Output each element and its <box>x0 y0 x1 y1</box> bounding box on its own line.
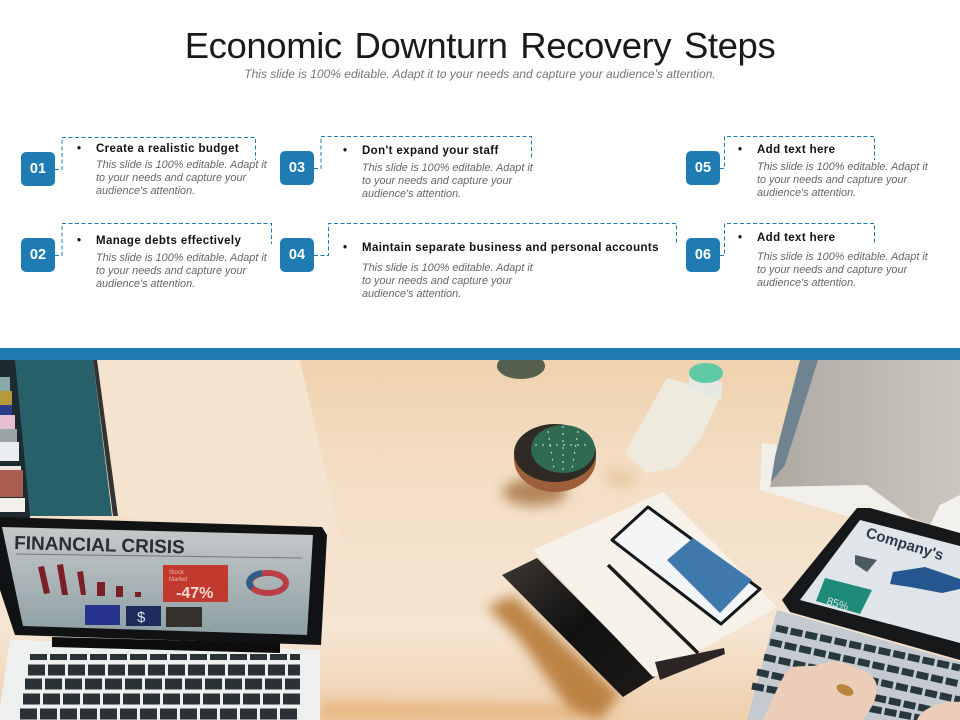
right laptop: Company's <box>864 525 946 564</box>
step 04 text: This slide is 100% editable. Adapt it <box>362 262 533 274</box>
step 06 badge: 06 <box>695 247 711 263</box>
screen donut <box>250 573 286 593</box>
step 05 text <box>757 161 928 199</box>
step 02 text: This slide is 100% editable. Adapt it <box>96 252 267 264</box>
step 06 text: to your needs and capture your <box>757 264 907 276</box>
right folder <box>760 360 960 535</box>
text: • <box>77 143 81 155</box>
step 01 text: audience's attention. <box>96 185 195 197</box>
step 06 heading: Add text here <box>757 232 835 244</box>
step 03 badge: 03 <box>289 160 305 176</box>
text: • <box>343 242 347 254</box>
left laptop <box>0 517 327 720</box>
screen tiles <box>85 605 120 625</box>
step 04 text: to your needs and capture your <box>362 275 512 287</box>
blue band <box>0 348 960 360</box>
step 03 badge <box>280 151 314 185</box>
screen red tile: -47% <box>176 585 213 602</box>
cup at top <box>497 353 545 379</box>
cactus in pot <box>514 424 596 492</box>
step 03 text: to your needs and capture your <box>362 175 512 187</box>
water bottle <box>625 363 723 473</box>
step 05 heading: Add text here <box>757 144 835 156</box>
screen red tile <box>163 565 228 602</box>
step 03 heading: Don't expand your staff <box>362 145 499 157</box>
step 01 text: to your needs and capture your <box>96 172 246 184</box>
step 05 text: to your needs and capture your <box>757 174 907 186</box>
left laptop: $ <box>137 609 146 626</box>
step 06 text <box>757 251 928 289</box>
step 02 heading: Manage debts effectively <box>96 235 241 247</box>
step 03 text <box>362 162 534 200</box>
step 02 text: audience's attention. <box>96 278 195 290</box>
step 04 text <box>362 262 534 300</box>
step 06 text: This slide is 100% editable. Adapt it <box>757 251 928 263</box>
step 04 heading: Maintain separate business and personal accounts <box>362 242 659 254</box>
screen title: FINANCIAL CRISIS <box>14 533 185 558</box>
text: • <box>738 144 742 156</box>
step 02 text <box>96 252 268 290</box>
photo: desk scene <box>0 360 960 720</box>
right laptop <box>747 508 960 720</box>
step 02 badge: 02 <box>30 247 46 263</box>
screen bars <box>38 564 141 597</box>
shadows <box>320 468 640 720</box>
text: • <box>738 232 742 244</box>
step 05 text: audience's attention. <box>757 187 856 199</box>
laptop hinge and deck <box>0 640 320 720</box>
phone <box>612 507 760 624</box>
step 04 badge: 04 <box>289 247 305 263</box>
step 01 text: This slide is 100% editable. Adapt it <box>96 159 267 171</box>
hand <box>763 662 877 720</box>
step 05 text: This slide is 100% editable. Adapt it <box>757 161 928 173</box>
step 04 text: audience's attention. <box>362 288 461 300</box>
step 04 badge <box>280 238 314 272</box>
pen <box>608 565 698 653</box>
step 01 heading: Create a realistic budget <box>96 143 239 155</box>
keyboard <box>20 657 300 714</box>
text: • <box>77 235 81 247</box>
step 03 text: audience's attention. <box>362 188 461 200</box>
subtitle: This slide is 100% editable. Adapt it to your needs and capture your audience's attention. <box>244 67 716 81</box>
screen red tile: Market <box>169 577 188 583</box>
screen red tile: Stock <box>169 570 185 576</box>
dashed connectors <box>55 136 875 256</box>
desk surface <box>0 360 960 720</box>
step 06 badge <box>686 238 720 272</box>
step 05 badge <box>686 151 720 185</box>
notebook with phone and pen <box>502 492 777 697</box>
step 05 badge: 05 <box>695 160 711 176</box>
left books and folder <box>0 360 342 556</box>
step 02 badge <box>21 238 55 272</box>
step 01 badge <box>21 152 55 186</box>
step 02 text: to your needs and capture your <box>96 265 246 277</box>
step 03 text: This slide is 100% editable. Adapt it <box>362 162 533 174</box>
step 01 text <box>96 159 268 197</box>
right laptop: 85% <box>825 595 850 613</box>
step 01 badge: 01 <box>30 161 46 177</box>
title: Economic Downturn Recovery Steps <box>185 25 775 66</box>
step 06 text: audience's attention. <box>757 277 856 289</box>
text: • <box>343 145 347 157</box>
